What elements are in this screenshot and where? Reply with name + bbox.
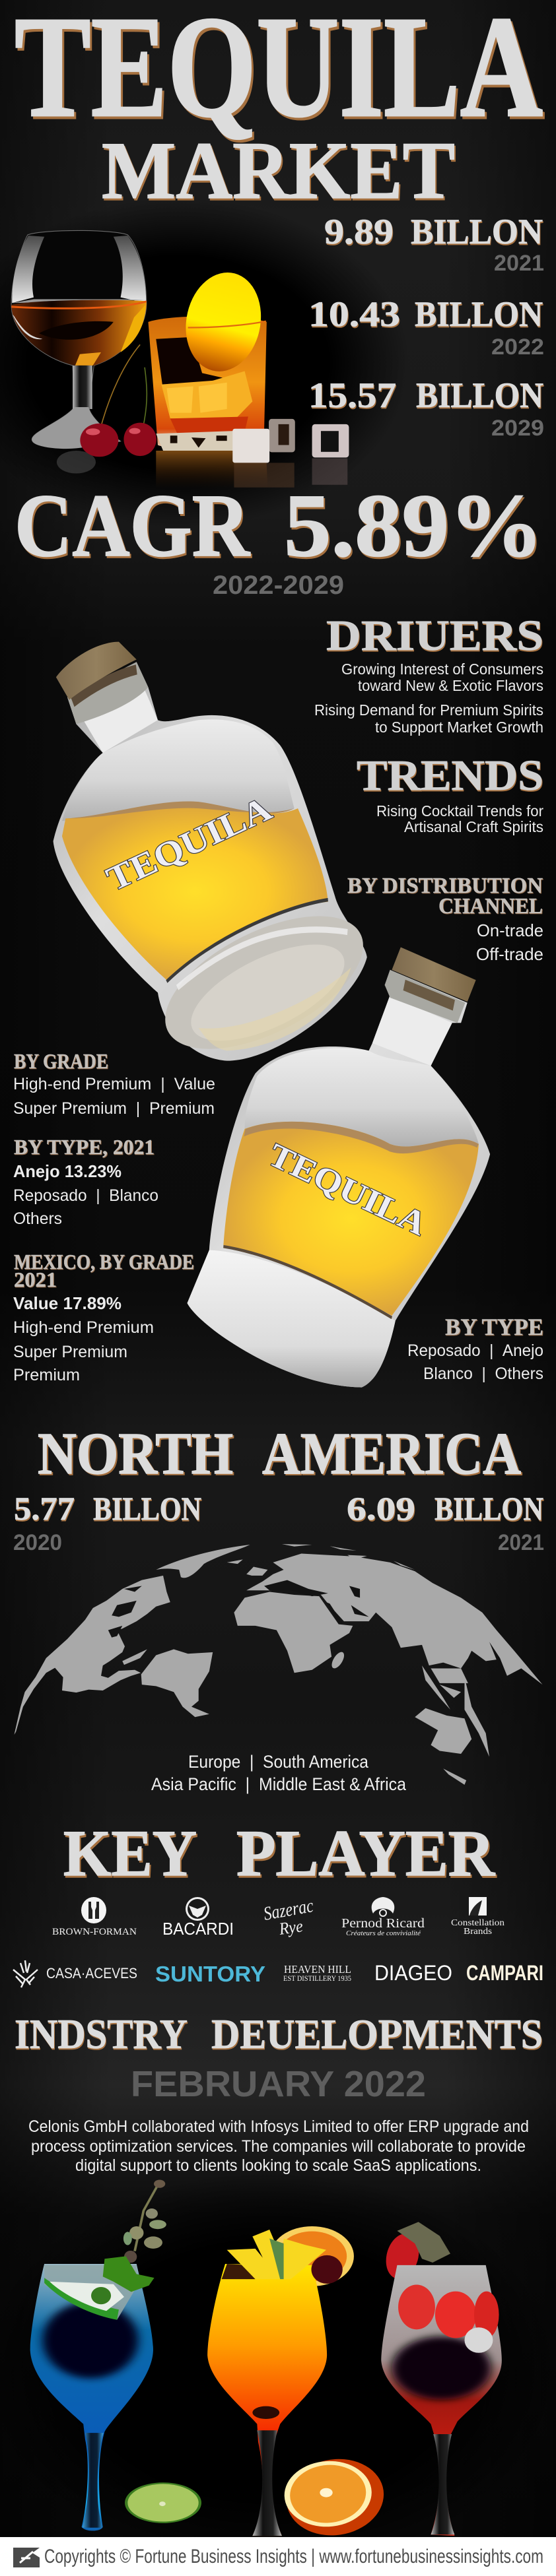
heading: North America: NORTH xyxy=(38,1421,233,1487)
rocks glass xyxy=(148,264,271,488)
logo: Casa Aceves: CASA·ACEVES xyxy=(46,1965,137,1981)
Africa xyxy=(234,1592,353,1673)
stat: 9.89 billion 2021: 2021 xyxy=(494,251,544,276)
stat: 5.77 billion 2020: 5.77 xyxy=(14,1490,75,1527)
segment: Mexico by grade 2021: Premium xyxy=(13,1366,80,1384)
logo: Constellation Brands xyxy=(451,1897,504,1937)
footer logo xyxy=(13,2548,40,2567)
segment: Mexico by grade 2021 xyxy=(13,1250,194,1384)
CAGR headline: CAGR xyxy=(15,476,251,575)
CAGR period: 2022-2029 xyxy=(213,571,344,600)
stat: 5.77 billion 2020 xyxy=(13,1490,201,1555)
logo: Pernod Ricard: Créateurs de convivialité xyxy=(346,1930,421,1937)
logo: Pernod Ricard: Pernod Ricard xyxy=(341,1916,425,1931)
logo: Brown-Forman: BROWN-FORMAN xyxy=(52,1927,137,1937)
text: trends list: Artisanal Craft Spirits xyxy=(404,818,543,835)
logo: Constellation Brands: Constellation xyxy=(451,1918,504,1928)
image: bottle one xyxy=(53,642,373,1076)
segment: by type xyxy=(407,1314,543,1383)
text: distribution channels: Off-trade xyxy=(476,944,543,964)
heading: North America: AMERICA xyxy=(262,1421,521,1487)
logo: Sazerac Rye: Rye xyxy=(277,1916,304,1939)
Madagascar xyxy=(330,1650,347,1670)
stat: 10.43 billion 2022 xyxy=(308,294,544,360)
logo: Bacardi: BACARDI xyxy=(162,1919,234,1939)
Eurasia xyxy=(246,1553,543,1685)
logo: Casa Aceves xyxy=(13,1960,137,1987)
text: distribution channels xyxy=(476,920,543,964)
bottle two label: TEQUILA xyxy=(263,1136,433,1242)
Australia xyxy=(415,1708,471,1754)
red cocktail xyxy=(381,2222,502,2536)
text: drivers list: toward New & Exotic Flavors xyxy=(358,677,543,694)
heading: industry developments: DEUELOPMENTS xyxy=(211,2011,543,2057)
stat: 15.57 billion 2029: BILLON xyxy=(416,375,543,415)
text: drivers list xyxy=(314,660,543,736)
stat: 6.09 billion 2021 xyxy=(347,1490,544,1555)
stat: 15.57 billion 2029: 2029 xyxy=(491,416,544,441)
image: cocktails xyxy=(0,2172,556,2569)
world map xyxy=(14,1544,543,1785)
segment: by grade xyxy=(13,1049,215,1118)
logo: Suntory: SUNTORY xyxy=(155,1962,265,1986)
segment: Mexico by grade 2021: 2021 xyxy=(14,1268,57,1291)
image: brandy glass and rocks glass xyxy=(11,230,349,488)
stat: 9.89 billion 2021 xyxy=(324,212,544,276)
segment: by grade: BY GRADE xyxy=(14,1049,108,1073)
Britain and Iceland xyxy=(227,1559,267,1576)
text: other regions: Asia Pacific | Middle East & Africa xyxy=(151,1774,407,1794)
logo: Sazerac Rye xyxy=(262,1895,315,1939)
lime xyxy=(125,2482,201,2523)
orange cocktail xyxy=(207,2226,354,2536)
segment: by type 2021: Others xyxy=(13,1209,62,1228)
backdrop xyxy=(0,2172,556,2569)
logo: Heaven Hill: EST DISTILLERY 1935 xyxy=(283,1974,351,1983)
segment: Mexico by grade 2021: High-end Premium xyxy=(13,1318,154,1337)
logo: Constellation Brands: Brands xyxy=(464,1927,492,1937)
stat: 9.89 billion 2021: 9.89 xyxy=(324,212,394,251)
segment: by type 2021: Reposado | Blanco xyxy=(13,1186,158,1205)
heading: trends: TRENDS xyxy=(357,752,543,800)
cherries xyxy=(80,344,156,457)
image: bottle two xyxy=(188,948,490,1388)
stat: 10.43 billion 2022: 10.43 xyxy=(308,294,400,334)
logo: Bacardi xyxy=(162,1897,234,1939)
text: other regions xyxy=(151,1752,407,1794)
development date: FEBRUARY 2022 xyxy=(131,2063,426,2104)
stat: 10.43 billion 2022: 2022 xyxy=(491,335,544,360)
heading: key player: KEY xyxy=(63,1817,197,1890)
ice cubes xyxy=(232,419,349,488)
logo: Heaven Hill: HEAVEN HILL xyxy=(284,1963,351,1976)
text: drivers list: Growing Interest of Consumers xyxy=(341,660,543,678)
heading: key player: PLAYER xyxy=(236,1817,496,1890)
logo: Diageo: DIAGEO xyxy=(374,1961,452,1985)
development text: digital support to clients looking to scale SaaS applications. xyxy=(75,2156,481,2175)
development text xyxy=(28,2117,529,2175)
stat: 6.09 billion 2021: 6.09 xyxy=(347,1490,415,1527)
stat: 6.09 billion 2021: 2021 xyxy=(498,1530,544,1555)
heading: industry developments: INDSTRY xyxy=(15,2011,188,2057)
segment: Mexico by grade 2021: Super Premium xyxy=(13,1343,127,1361)
logo: Brown-Forman xyxy=(52,1897,137,1937)
stat: 5.77 billion 2020: BILLON xyxy=(93,1490,201,1527)
logo: Heaven Hill xyxy=(283,1963,351,1983)
brandy glass xyxy=(11,230,147,474)
segment: Mexico by grade 2021: Value 17.89% xyxy=(13,1293,122,1313)
Southeast Asia and islands xyxy=(422,1665,489,1756)
stat: 10.43 billion 2022: BILLON xyxy=(415,294,543,334)
text: other regions: Europe | South America xyxy=(188,1752,369,1772)
heading: by distribution channel xyxy=(347,874,543,918)
heading: by distribution channel: BY DISTRIBUTION xyxy=(347,874,543,898)
segment: by type 2021 xyxy=(13,1135,158,1228)
text: distribution channels: On-trade xyxy=(477,920,543,940)
segment: by type: Blanco | Others xyxy=(423,1365,543,1383)
segment: by type: Reposado | Anejo xyxy=(407,1341,543,1360)
heading: drivers: DRIUERS xyxy=(326,612,543,660)
logo: Pernod Ricard xyxy=(341,1897,425,1937)
image: black backdrop xyxy=(0,198,409,528)
New Zealand xyxy=(443,1768,466,1785)
segment: by type: BY TYPE xyxy=(445,1314,543,1340)
blue cocktail xyxy=(30,2179,166,2530)
footer bar xyxy=(0,2537,556,2576)
development text: process optimization services. The companies will collaborate to provide xyxy=(31,2137,526,2156)
segment: Mexico by grade 2021: MEXICO, BY GRADE xyxy=(14,1250,194,1273)
Arctic islands xyxy=(282,1544,415,1570)
orange half xyxy=(271,2449,399,2545)
text: drivers list: Rising Demand for Premium Spirits xyxy=(314,701,543,719)
text: trends list: Rising Cocktail Trends for xyxy=(376,802,543,820)
logo: Sazerac Rye: Sazerac xyxy=(262,1895,315,1925)
North America xyxy=(14,1576,170,1735)
stat: 15.57 billion 2029 xyxy=(308,375,544,441)
stat: 5.77 billion 2020: 2020 xyxy=(13,1530,62,1555)
text: drivers list: to Support Market Growth xyxy=(375,719,543,736)
South America xyxy=(141,1650,213,1717)
segment: by grade: Super Premium | Premium xyxy=(13,1099,215,1118)
heading: by distribution channel: CHANNEL xyxy=(438,894,543,918)
segment: by type 2021: Anejo 13.23% xyxy=(13,1161,122,1181)
stat: 15.57 billion 2029: 15.57 xyxy=(308,375,396,415)
segment: by grade: High-end Premium | Value xyxy=(13,1075,215,1093)
CAGR headline: 5.89% xyxy=(284,476,543,575)
development text: Celonis GmbH collaborated with Infosys Limited to offer ERP upgrade and xyxy=(28,2117,529,2136)
Greenland xyxy=(156,1545,250,1578)
text: trends list xyxy=(376,802,543,835)
title: Market: MARKET xyxy=(102,125,455,216)
bottle one label: TEQUILA xyxy=(101,790,277,899)
segment: by type 2021: BY TYPE, 2021 xyxy=(14,1135,155,1159)
stat: 9.89 billion 2021: BILLON xyxy=(411,212,543,251)
